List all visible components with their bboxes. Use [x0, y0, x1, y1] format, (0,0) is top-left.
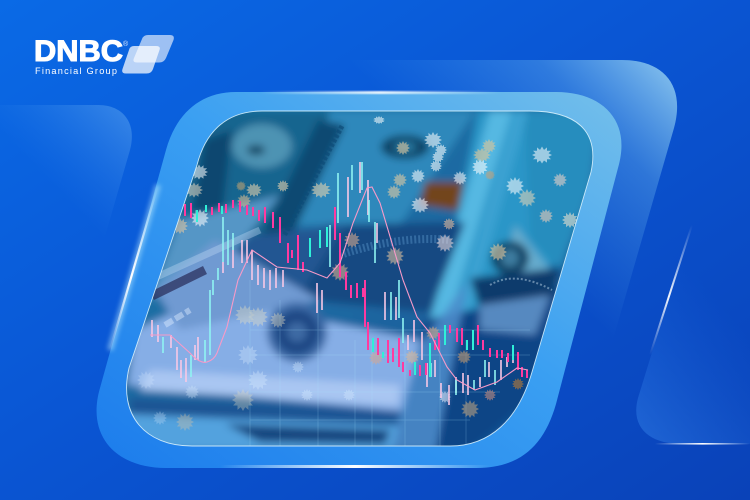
image thin border — [127, 111, 593, 446]
moving average line — [150, 187, 528, 390]
banknote photo background — [126, 111, 592, 446]
registered mark: ® — [123, 40, 129, 48]
banknote engraving details — [150, 126, 552, 325]
candlestick series: bright cyan candles — [197, 205, 513, 377]
fine grid lines — [250, 280, 530, 446]
logo subtitle: Financial Group — [35, 66, 117, 76]
photo: banknotes with market chart — [126, 111, 592, 446]
logo wordmark: DNBC — [34, 35, 123, 68]
panel: right decorative card — [636, 222, 750, 445]
candlestick series: bright pink candles — [185, 200, 527, 378]
panel: image frame — [97, 91, 621, 468]
panel: left decorative card — [0, 105, 132, 240]
candlestick series: pale rising and falling — [152, 162, 513, 405]
logo icon: overlapping parallelograms — [122, 35, 174, 74]
panel: back translucent card — [280, 60, 677, 350]
logo: DNBC Financial Group — [34, 35, 174, 76]
coin burst particles — [137, 116, 578, 431]
